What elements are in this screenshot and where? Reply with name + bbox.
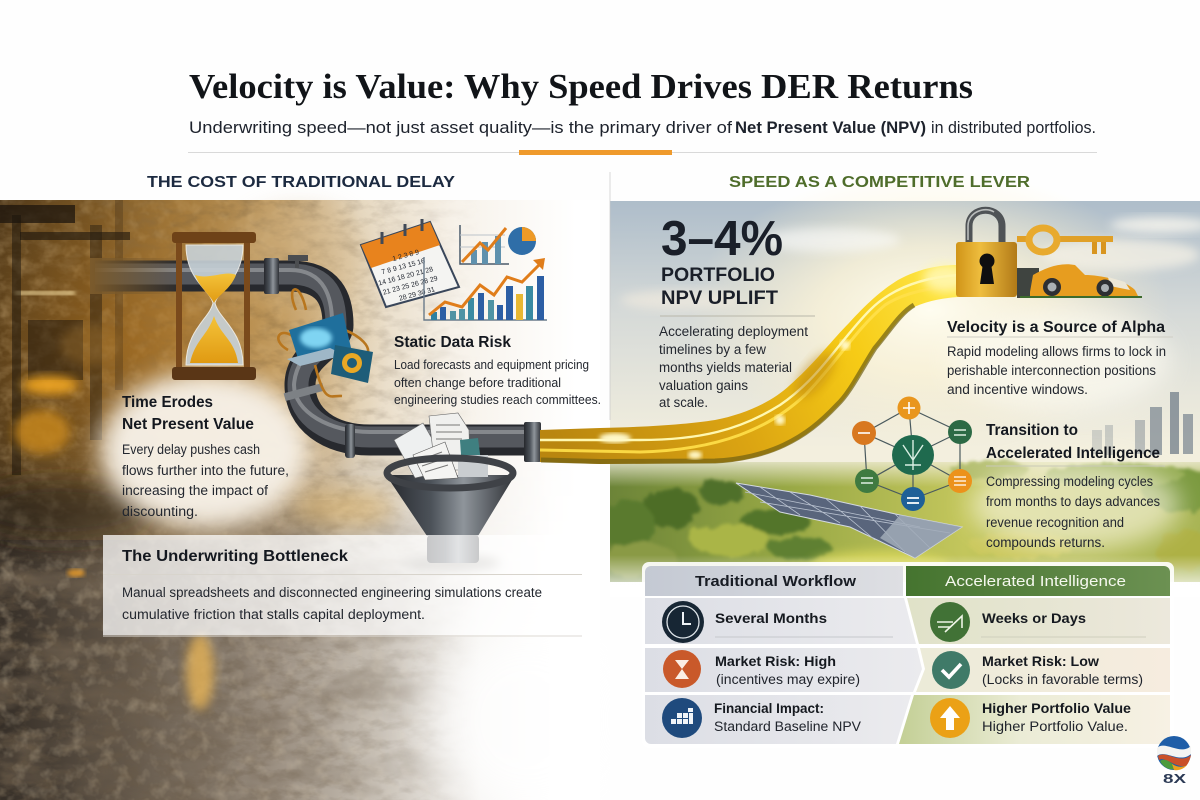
icon: laptop and gear with cables <box>278 289 373 396</box>
icon: calendar: 1 2 3 8 9 <box>392 249 420 263</box>
text block: velocity is a source of alpha: Rapid modeling allows firms to lock in <box>947 344 1166 359</box>
stat: 3-4% portfolio npv uplift: valuation gains <box>659 378 748 393</box>
table header: traditional workflow <box>645 566 903 596</box>
gold ribbon <box>540 264 967 464</box>
icon: calendar: 7 8 9 13 15 16 <box>381 258 426 276</box>
row: market risk low: Market Risk: Low <box>982 653 1099 669</box>
table header: accelerated intelligence: Accelerated Intelligence <box>945 573 1126 590</box>
row: financial impact <box>645 695 911 744</box>
text block: static data risk: engineering studies reach committees. <box>394 393 601 407</box>
stat: 3-4% portfolio npv uplift: months yields material <box>659 360 792 375</box>
subtitle: Underwriting speed—not just asset quality—is the primary driver of <box>189 118 732 137</box>
row: market risk high <box>645 648 922 692</box>
panel: the underwriting bottleneck: The Underwriting Bottleneck <box>122 548 348 565</box>
text block: transition to accelerated intelligence <box>986 422 1165 550</box>
title rule with orange accent <box>188 150 1097 155</box>
icon: calendar <box>361 219 459 307</box>
text block: static data risk <box>394 334 601 407</box>
row: market risk high: (incentives may expire) <box>716 672 860 687</box>
text block: time erodes net present value: increasing the impact of <box>122 483 268 498</box>
icon: small chart and pie <box>460 225 536 264</box>
icon: calendar: 21 23 25 26 28 29 <box>382 275 439 297</box>
subtitle <box>189 118 1096 137</box>
text block: time erodes net present value: Every delay pushes cash <box>122 442 260 457</box>
stat: 3-4% portfolio npv uplift: NPV UPLIFT <box>661 288 778 309</box>
icon: calendar: 28 29 30 31 <box>398 286 436 303</box>
table header: accelerated intelligence <box>906 566 1170 596</box>
text block: velocity is a source of alpha: Velocity is a Source of Alpha <box>947 319 1165 336</box>
left panel: industrial background <box>0 196 524 800</box>
text block: transition to accelerated intelligence: compounds returns. <box>986 535 1105 550</box>
icon: accelerated intelligence network <box>852 396 972 511</box>
icon: golden key <box>1017 228 1113 254</box>
row: weeks or days <box>907 598 1170 644</box>
text block: transition to accelerated intelligence: from months to days advances <box>986 494 1160 509</box>
icon: hourglass <box>172 232 256 380</box>
icon: funnel with papers <box>386 413 515 571</box>
heading: the cost of traditional delay: THE COST OF TRADITIONAL DELAY <box>147 174 455 191</box>
heading: speed as a competitive lever: SPEED AS A COMPETITIVE LEVER <box>729 174 1030 191</box>
row: several months: Several Months <box>715 610 827 626</box>
subtitle: in distributed portfolios. <box>931 118 1096 137</box>
stat: 3-4% portfolio npv uplift <box>659 212 815 410</box>
skyline <box>1092 392 1193 455</box>
row: financial impact: Financial Impact: <box>714 700 824 716</box>
text block: transition to accelerated intelligence: Compressing modeling cycles <box>986 474 1153 489</box>
text block: velocity is a source of alpha: perishable interconnection positions <box>947 363 1156 378</box>
title: Velocity is Value: Why Speed Drives DER Returns <box>189 67 973 106</box>
logo: 8X <box>1157 736 1191 786</box>
comparison table <box>642 562 1174 748</box>
right panel: sky and landscape background <box>610 189 1200 582</box>
row: financial impact: Standard Baseline NPV <box>714 719 861 734</box>
row: higher portfolio value: Higher Portfolio Value <box>982 700 1131 716</box>
stat: 3-4% portfolio npv uplift: 3–4% <box>661 212 783 266</box>
table header: traditional workflow: Traditional Workflow <box>695 573 856 590</box>
text block: time erodes net present value: discounting. <box>122 504 198 519</box>
stat: 3-4% portfolio npv uplift: Accelerating deployment <box>659 324 808 339</box>
row: weeks or days: Weeks or Days <box>982 610 1086 626</box>
subtitle: Net Present Value (NPV) <box>735 118 926 137</box>
text block: transition to accelerated intelligence: Accelerated Intelligence <box>986 445 1160 462</box>
row: several months <box>645 598 916 644</box>
row: higher portfolio value: Higher Portfolio Value. <box>982 719 1128 734</box>
logo: 8X: 8X <box>1163 771 1186 786</box>
text block: velocity is a source of alpha <box>947 319 1173 397</box>
row: market risk low: (Locks in favorable terms) <box>982 672 1143 687</box>
text block: transition to accelerated intelligence: Transition to <box>986 422 1078 439</box>
panel: the underwriting bottleneck: cumulative friction that stalls capital deployment. <box>122 607 425 622</box>
icon: sports car <box>1017 264 1142 298</box>
stat: 3-4% portfolio npv uplift: timelines by a few <box>659 342 766 357</box>
icon: solar panels <box>736 483 962 558</box>
icon: large rising chart <box>424 257 547 320</box>
icon: calendar: 14 16 18 20 21 28 <box>378 266 434 287</box>
text block: time erodes net present value: flows further into the future, <box>122 463 289 478</box>
icon: metal pipe <box>90 255 541 462</box>
text block: transition to accelerated intelligence: revenue recognition and <box>986 515 1124 530</box>
text block: time erodes net present value: Time Erodes <box>122 394 213 411</box>
row: higher portfolio value <box>899 695 1170 744</box>
section divider line <box>609 172 611 420</box>
text block: static data risk: Load forecasts and equipment pricing <box>394 358 589 372</box>
stat: 3-4% portfolio npv uplift: PORTFOLIO <box>661 265 775 286</box>
panel: the underwriting bottleneck <box>103 535 582 636</box>
text block: velocity is a source of alpha: and incentive windows. <box>947 382 1088 397</box>
panel: the underwriting bottleneck: Manual spreadsheets and disconnected engineering simulations create <box>122 585 542 600</box>
row: market risk low <box>916 648 1170 692</box>
text block: time erodes net present value <box>122 394 289 519</box>
stat: 3-4% portfolio npv uplift: at scale. <box>659 395 708 410</box>
text block: time erodes net present value: Net Present Value <box>122 416 254 433</box>
icon: padlock <box>956 210 1017 297</box>
text block: static data risk: Static Data Risk <box>394 334 511 351</box>
text block: static data risk: often change before traditional <box>394 376 561 390</box>
row: market risk high: Market Risk: High <box>715 653 836 669</box>
